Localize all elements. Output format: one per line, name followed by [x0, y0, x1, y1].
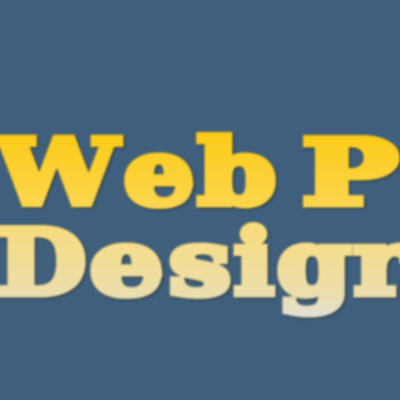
- heading shadow: g: [278, 212, 352, 318]
- heading shadow: b: [200, 122, 278, 228]
- heading line two: r: [354, 210, 400, 316]
- heading line one: b: [198, 120, 276, 226]
- heading shadow: [0, 122, 400, 318]
- heading line two: [0, 210, 400, 316]
- heading shadow: i: [236, 212, 276, 318]
- heading shadow: D: [0, 212, 88, 318]
- heading line one: P: [302, 120, 398, 226]
- heading: Web P / Design: [0, 120, 400, 316]
- heading shadow: W: [0, 122, 122, 228]
- heading line two: g: [277, 210, 351, 316]
- heading line two: s: [169, 210, 231, 316]
- heading line one: [0, 120, 398, 226]
- heading shadow: P: [304, 122, 400, 228]
- heading line two: e: [90, 210, 163, 316]
- heading shadow: e: [92, 212, 164, 318]
- heading shadow: s: [170, 212, 232, 318]
- heading line one: e: [124, 120, 194, 226]
- heading shadow: e: [126, 122, 196, 228]
- heading line two: i: [234, 210, 274, 316]
